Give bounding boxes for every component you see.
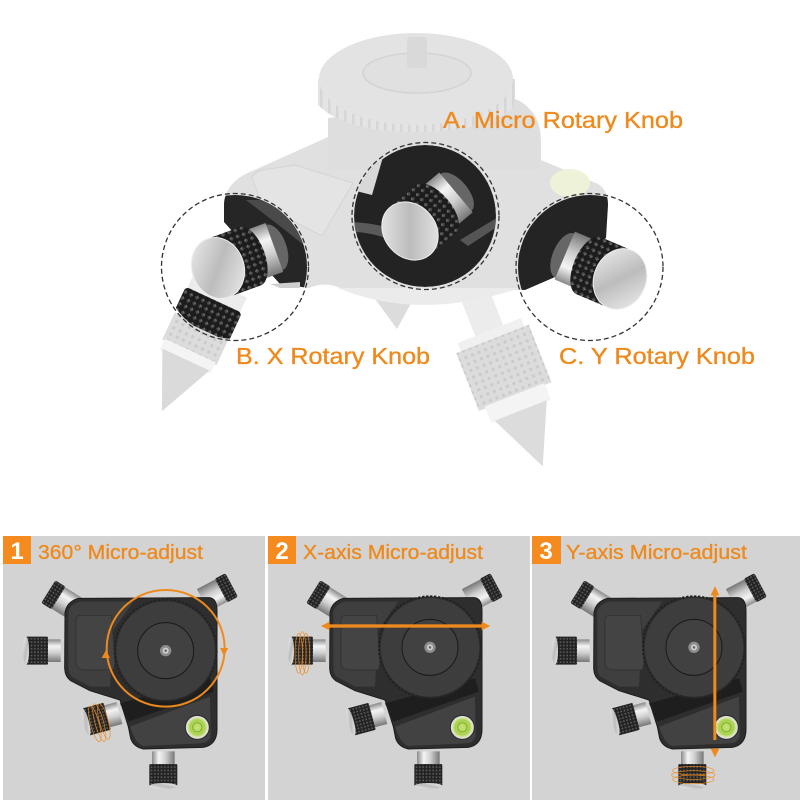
number badge 1: 1	[10, 538, 24, 565]
ghost front leg	[440, 283, 579, 481]
panel 2: X-axis micro-adjust	[268, 536, 530, 800]
ghost underside ring	[338, 288, 520, 305]
number badge 1	[3, 536, 31, 565]
heading 2: X-axis Micro-adjust	[303, 542, 483, 564]
number badge 2	[268, 536, 296, 565]
panel 1: 360 degree micro-adjust	[3, 536, 265, 800]
device photo 1	[23, 573, 238, 789]
device photo 3	[552, 573, 767, 789]
number badge 3	[532, 536, 561, 565]
number badge 3: 3	[539, 538, 553, 565]
panel 3: Y-axis micro-adjust	[532, 536, 800, 800]
vertical double arrow	[711, 586, 719, 757]
knob rotation swirl 1	[86, 702, 113, 744]
ghost rear leg	[373, 296, 415, 329]
knob rotation swirl 2	[295, 632, 310, 675]
number badge 2: 2	[275, 538, 289, 565]
product photo: faded base with highlighted knobs	[135, 33, 663, 481]
knob rotation swirl 3	[672, 766, 715, 784]
horizontal double arrow	[321, 622, 490, 630]
dashed circle B	[162, 194, 308, 340]
ghost level vial	[550, 169, 590, 197]
ghost rotary dial	[318, 33, 540, 170]
knob C highlight	[518, 195, 648, 310]
dashed circle A	[352, 142, 499, 290]
dashed circle C	[516, 194, 663, 340]
label A: A. Micro Rotary Knob	[443, 107, 683, 133]
ghost body	[224, 100, 608, 290]
ghost left leg	[135, 312, 229, 424]
knob A highlight	[352, 145, 500, 287]
heading 3: Y-axis Micro-adjust	[566, 542, 747, 564]
device photo 2	[288, 573, 503, 789]
heading 1: 360° Micro-adjust	[38, 542, 203, 564]
label B: B. X Rotary Knob	[236, 343, 430, 369]
label C: C. Y Rotary Knob	[559, 343, 755, 369]
rotation arrow circle	[102, 590, 228, 707]
knob B highlight	[176, 195, 307, 339]
